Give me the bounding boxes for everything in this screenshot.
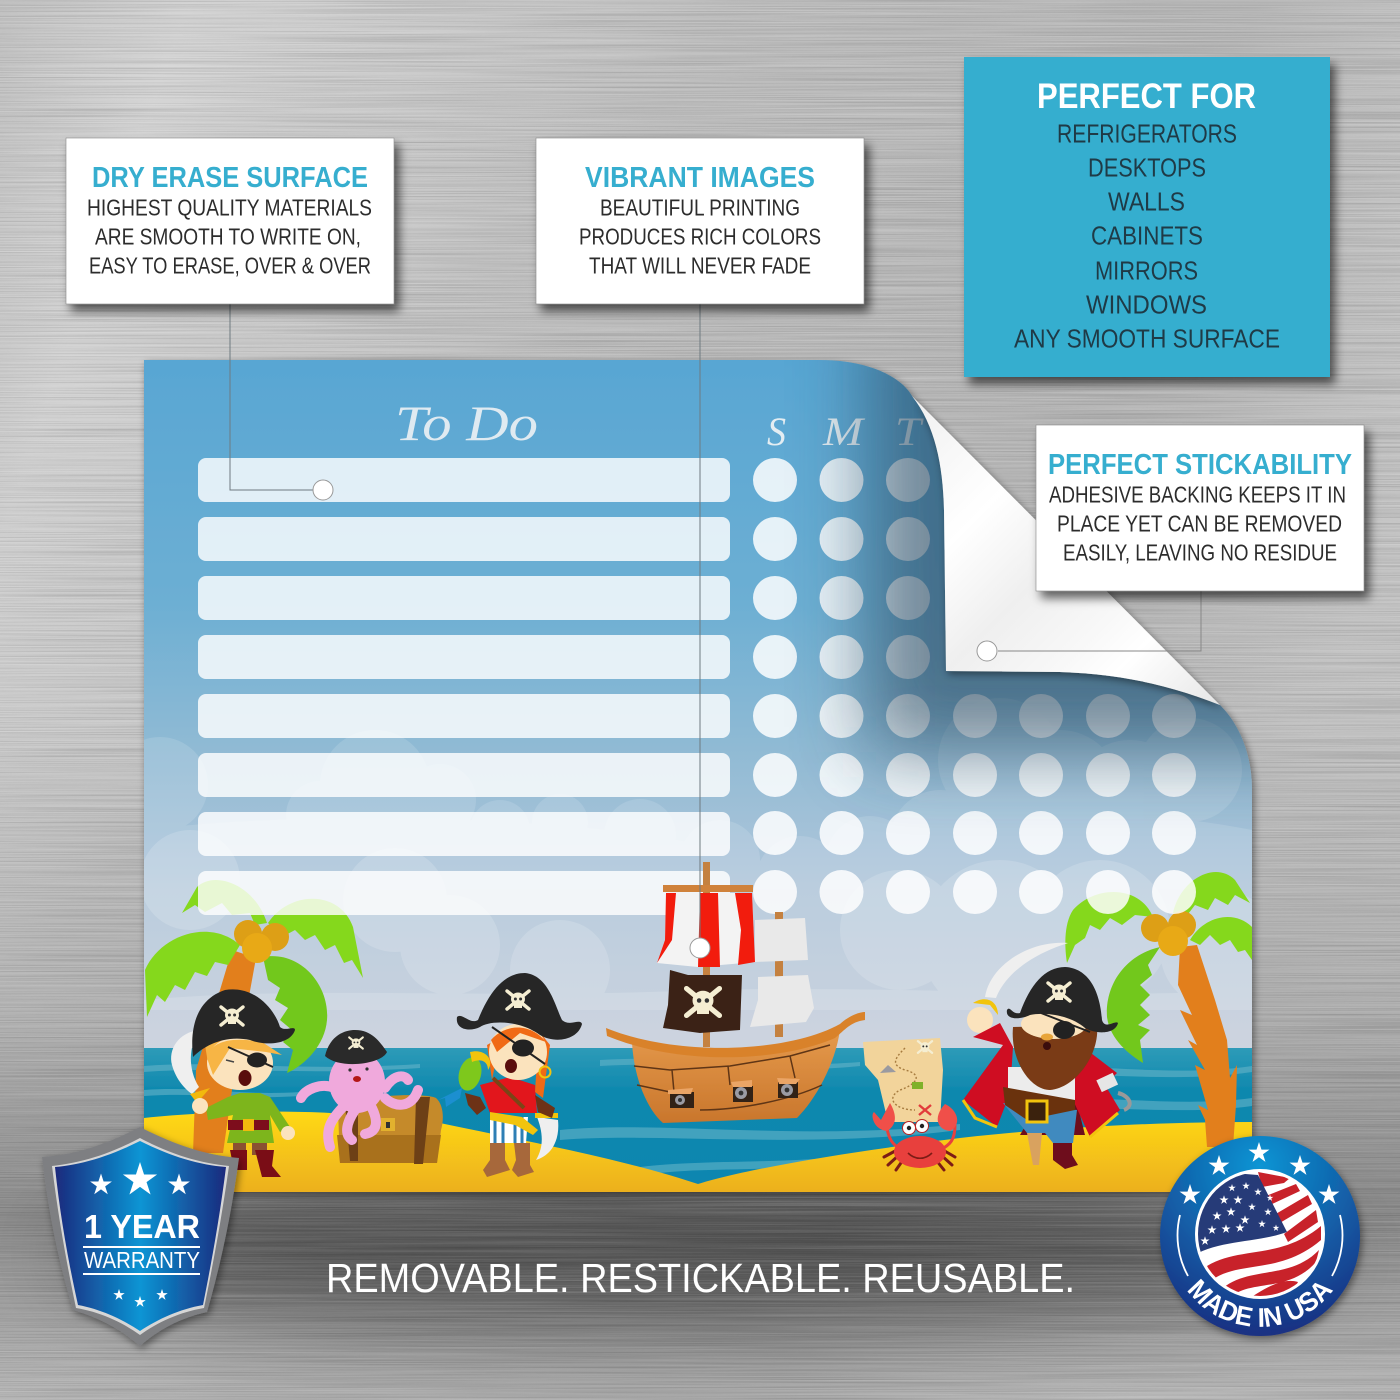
right palm tree (1065, 872, 1252, 1147)
panel: perfect for: MIRRORS (1095, 256, 1198, 286)
weekday letters: T (895, 409, 924, 454)
callout: vibrant images: VIBRANT IMAGES (585, 162, 815, 194)
weekday letters (768, 418, 924, 446)
panel: perfect for: DESKTOPS (1088, 152, 1206, 182)
badge: 1 year warranty: WARRANTY (84, 1247, 200, 1273)
badge: 1 year warranty (42, 1127, 239, 1346)
callout: perfect stickability: EASILY, LEAVING NO RESIDUE (1063, 540, 1337, 566)
task list rows (198, 458, 730, 915)
dry erase sheet (141, 358, 1259, 1199)
panel: perfect for: CABINETS (1091, 220, 1203, 250)
treasure map (863, 1038, 943, 1122)
panel: perfect for: REFRIGERATORS (1057, 118, 1237, 148)
crab (873, 1103, 957, 1170)
panel: perfect for: WINDOWS (1086, 290, 1207, 320)
badge: 1 year warranty: 1 YEAR (84, 1208, 200, 1245)
callout: perfect stickability (1036, 425, 1364, 591)
red-haired pirate boy (438, 973, 582, 1177)
pirate ship (606, 862, 865, 1123)
badge: made in USA: MADE IN USA (1188, 1278, 1334, 1327)
callout: vibrant images: BEAUTIFUL PRINTING (600, 194, 800, 220)
callout: vibrant images (536, 138, 864, 304)
blond pirate boy (171, 989, 295, 1177)
weekday check circles (753, 458, 1196, 914)
weekday letters: M (822, 409, 866, 454)
badge: made in USA (1158, 1134, 1366, 1344)
panel: perfect for (964, 57, 1330, 377)
panel: perfect for: PERFECT FOR (1037, 77, 1256, 116)
sea (144, 1048, 1252, 1193)
callout: vibrant images: THAT WILL NEVER FADE (589, 252, 811, 278)
panel: perfect for: WALLS (1108, 186, 1185, 216)
callout: dry erase surface: DRY ERASE SURFACE (92, 162, 368, 194)
left palm tree (145, 880, 363, 1153)
treasure chest (337, 1095, 443, 1164)
panel: perfect for: ANY SMOOTH SURFACE (1014, 324, 1280, 354)
leader: dry erase (230, 304, 333, 500)
leader: vibrant images (690, 304, 710, 958)
callout: vibrant images: PRODUCES RICH COLORS (579, 224, 821, 250)
upper clouds (144, 714, 1252, 984)
peeled corner (912, 396, 1220, 705)
lower clouds (140, 830, 1280, 1050)
sky background (144, 360, 1252, 1060)
callout: perfect stickability: PERFECT STICKABILITY (1048, 449, 1352, 481)
tagline: REMOVABLE. RESTICKABLE. REUSABLE. (326, 1255, 1075, 1301)
pink octopus (301, 1030, 418, 1147)
callout: dry erase surface (66, 138, 394, 304)
callout: dry erase surface: ARE SMOOTH TO WRITE ON, (95, 224, 361, 250)
callout: dry erase surface: EASY TO ERASE, OVER & OVER (89, 252, 371, 278)
seal stars (1180, 1142, 1339, 1204)
To Do heading: To Do (395, 395, 538, 451)
callout: perfect stickability: PLACE YET CAN BE REMOVED (1057, 510, 1342, 536)
weekday letters: S (767, 409, 786, 454)
peel shadow (820, 360, 1252, 803)
bearded pirate captain (963, 943, 1130, 1169)
leader: stickability (977, 591, 1201, 661)
callout: dry erase surface: HIGHEST QUALITY MATERIALS (87, 194, 372, 220)
warranty stars (90, 1162, 190, 1307)
sand islands (144, 1112, 1252, 1192)
american flag (1198, 1172, 1321, 1296)
